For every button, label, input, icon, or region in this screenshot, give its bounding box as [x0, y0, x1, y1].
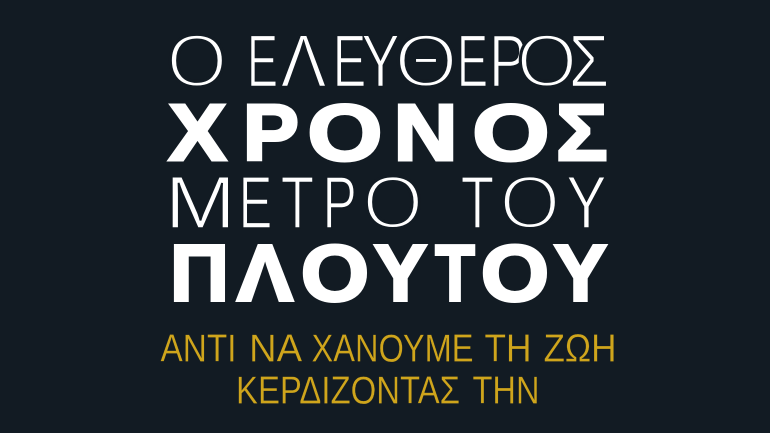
- title line 3: Ε: [239, 161, 272, 244]
- title line 2: Ν: [394, 88, 458, 177]
- title line 1: Υ: [361, 20, 400, 102]
- title line 1: Σ: [569, 20, 609, 102]
- title line 4: Λ: [237, 228, 293, 318]
- title line 3: Τ: [281, 161, 314, 244]
- subtitle line 2: ΚΕΡΔΙΖΟΝΤΑΣ: [236, 370, 460, 412]
- title block: [165, 20, 609, 318]
- title line 4: Τ: [435, 228, 475, 318]
- title line 2: Ρ: [243, 88, 299, 177]
- title line 3: Τ: [461, 161, 494, 244]
- title line 3: Ο: [363, 161, 423, 244]
- title line 1: Λ: [281, 20, 327, 102]
- subtitle block: [160, 328, 616, 412]
- title line 4: Π: [170, 228, 229, 318]
- title line 1: Θ: [395, 20, 457, 102]
- title line 2: Χ: [169, 88, 226, 177]
- title line 3: Μ: [165, 161, 236, 244]
- subtitle line 1: ΝΑ: [249, 328, 302, 370]
- title line 2: Ο: [472, 88, 550, 177]
- subtitle line 1: ΤΗ: [484, 328, 532, 370]
- title line 1: Ε: [333, 20, 366, 102]
- title line 1: Ο: [517, 20, 577, 102]
- title line 3: Υ: [566, 161, 607, 244]
- title line 1: Ε: [457, 20, 488, 102]
- subtitle line 1: ΧΑΝΟΥΜΕ: [312, 328, 474, 370]
- subtitle line 1: ΖΩΗ: [544, 328, 616, 370]
- title line 3: Ρ: [323, 161, 357, 244]
- title line 3: Ο: [500, 161, 560, 244]
- title line 2: Ο: [308, 88, 382, 177]
- subtitle line 1: ΑΝΤΙ: [160, 328, 236, 370]
- title line 2: Σ: [556, 88, 608, 177]
- title line 4: Ο: [481, 228, 549, 318]
- title line 1: Ο: [167, 20, 227, 102]
- subtitle line 2: ΤΗΝ: [472, 370, 540, 412]
- title line 4: Υ: [554, 228, 607, 318]
- title line 1: Ρ: [489, 20, 527, 102]
- title line 4: Ο: [301, 228, 369, 318]
- title line 4: Υ: [374, 228, 427, 318]
- title line 1: Ε: [247, 20, 278, 102]
